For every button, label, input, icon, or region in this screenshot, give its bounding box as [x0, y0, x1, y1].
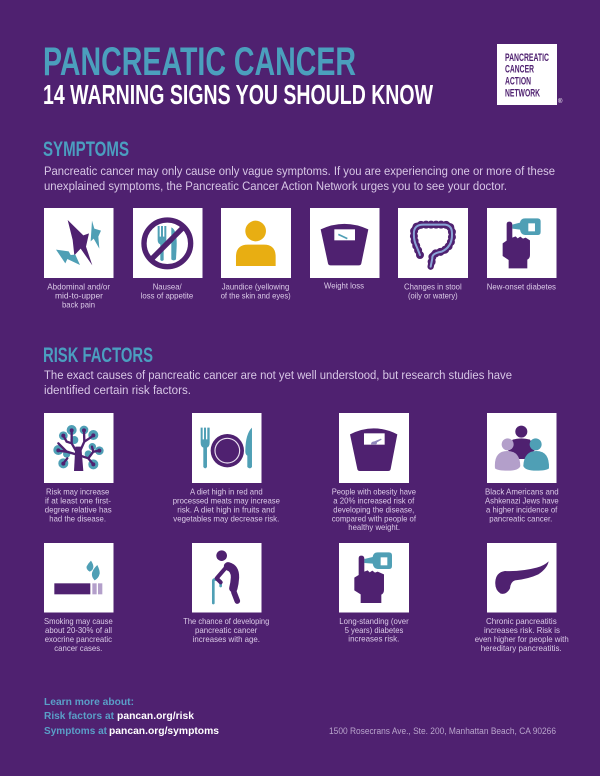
logo: NETWORK	[505, 88, 540, 100]
icon: finger and glucose meter	[354, 552, 392, 603]
panel: pancreatitis	[475, 543, 569, 653]
risk factors intro text: The exact causes of pancreatic cancer are not yet well understood, but research studies have	[44, 368, 512, 382]
panel: weight loss	[310, 208, 380, 290]
caption: cancer cases.	[54, 644, 102, 653]
icon: finger and glucose meter	[503, 218, 541, 268]
caption: mid-to-upper	[55, 292, 103, 300]
symptoms intro text: Pancreatic cancer may only cause only vague symptoms. If you are experiencing one or more of these	[44, 164, 555, 178]
caption: (oily or watery)	[408, 292, 458, 300]
caption: increases risk. Risk is	[484, 626, 560, 635]
logo	[497, 44, 563, 105]
panel: diet	[173, 413, 280, 524]
caption	[475, 617, 569, 653]
caption	[173, 488, 280, 524]
caption: Black Americans and	[485, 488, 559, 496]
icon: yellow person	[236, 221, 276, 266]
title: PANCREATIC CANCER	[43, 40, 356, 84]
panel: long-standing diabetes	[339, 543, 409, 644]
caption: hereditary pancreatitis.	[481, 644, 562, 653]
caption: compared with people of	[332, 514, 417, 524]
caption: vegetables may decrease risk.	[173, 514, 279, 524]
logo: ACTION	[505, 76, 531, 88]
caption	[404, 282, 462, 300]
caption: developing the disease,	[333, 506, 414, 514]
caption: 5 years) diabetes	[345, 626, 403, 635]
icon: group of people	[495, 426, 549, 471]
caption: The chance of developing	[183, 617, 270, 626]
icon: lightning bolts	[56, 220, 101, 265]
footer links: pancan.org/symptoms	[109, 725, 219, 737]
panel: nausea	[133, 208, 202, 300]
caption: pancreatic cancer.	[489, 514, 552, 524]
icon: family tree	[53, 425, 104, 471]
title	[43, 40, 433, 110]
caption	[47, 282, 110, 310]
caption	[45, 488, 112, 524]
footer links: pancan.org/risk	[117, 710, 194, 722]
caption: Chronic pancreatitis	[486, 617, 557, 626]
caption: degree relative has	[45, 506, 112, 514]
footer links	[44, 696, 219, 737]
caption: Abdominal and/or	[47, 282, 110, 292]
caption: New-onset diabetes	[487, 282, 556, 292]
icon: no eating	[144, 220, 191, 267]
panel: changes in stool	[398, 208, 468, 300]
caption	[485, 488, 559, 524]
caption: risk. A diet high in fruits and	[177, 506, 275, 514]
icon: cigarette	[54, 561, 102, 594]
caption: Ashkenazi Jews have	[485, 496, 559, 506]
caption	[44, 617, 113, 653]
icon: elderly person with cane	[213, 550, 237, 603]
caption: Jaundice (yellowing	[222, 282, 290, 292]
title: 14 WARNING SIGNS YOU SHOULD KNOW	[43, 79, 433, 110]
panel: family history	[44, 413, 114, 524]
caption: A diet high in red and	[190, 488, 263, 496]
risk factors intro text	[44, 368, 512, 397]
symptoms intro text	[44, 164, 555, 193]
caption: healthy weight.	[348, 523, 400, 532]
caption: Long-standing (over	[339, 617, 409, 626]
footer links: Symptoms at	[44, 725, 107, 737]
heading: symptoms: SYMPTOMS	[43, 138, 129, 161]
icon: colon	[414, 225, 452, 267]
caption	[332, 488, 417, 532]
risk factors intro text: identified certain risk factors.	[44, 383, 191, 397]
caption: Smoking may cause	[44, 617, 113, 626]
caption: had the disease.	[49, 514, 106, 524]
symptoms intro text: unexplained symptoms, the Pancreatic Cancer Action Network urges you to see your doctor.	[44, 179, 507, 193]
panel: jaundice	[221, 208, 291, 300]
caption: even higher for people with	[475, 635, 569, 644]
caption: loss of appetite	[141, 292, 194, 300]
caption	[141, 282, 194, 300]
caption: a higher incidence of	[486, 506, 558, 514]
caption: a 20% increased risk of	[333, 496, 415, 506]
caption: of the skin and eyes)	[221, 292, 291, 300]
caption: exocrine pancreatic	[45, 635, 112, 644]
caption: People with obesity have	[332, 488, 416, 496]
caption: Risk may increase	[46, 488, 110, 496]
panel: smoking	[44, 543, 114, 653]
caption: increases with age.	[193, 635, 260, 644]
caption	[183, 617, 270, 644]
caption: Nausea/	[153, 282, 182, 292]
panel: new-onset diabetes	[487, 208, 556, 292]
icon: scale	[321, 224, 368, 265]
icon: plate with fork and knife	[201, 428, 252, 468]
caption: back pain	[62, 300, 95, 310]
caption: increases risk.	[348, 634, 399, 644]
footer links: Learn more about:	[44, 696, 134, 708]
caption: Weight loss	[324, 282, 364, 290]
caption: if at least one first-	[45, 496, 111, 506]
logo: PANCREATIC	[505, 52, 549, 64]
logo: ®	[558, 98, 563, 105]
caption	[221, 282, 291, 300]
icon: scale	[350, 428, 397, 471]
panel: abdominal pain	[44, 208, 114, 310]
heading: risk factors: RISK FACTORS	[43, 344, 153, 367]
caption: pancreatic cancer	[195, 626, 258, 635]
panel: age	[183, 543, 270, 644]
caption: about 20-30% of all	[45, 626, 112, 635]
caption: Changes in stool	[404, 282, 462, 292]
caption	[339, 617, 409, 644]
caption: processed meats may increase	[173, 496, 280, 506]
panel: ethnicity	[485, 413, 559, 524]
footer links: Risk factors at	[44, 710, 114, 722]
icon: pancreas	[495, 561, 549, 594]
logo: CANCER	[505, 64, 534, 76]
footer address: 1500 Rosecrans Ave., Ste. 200, Manhattan Beach, CA 90266	[329, 726, 556, 736]
panel: obesity	[332, 413, 417, 532]
